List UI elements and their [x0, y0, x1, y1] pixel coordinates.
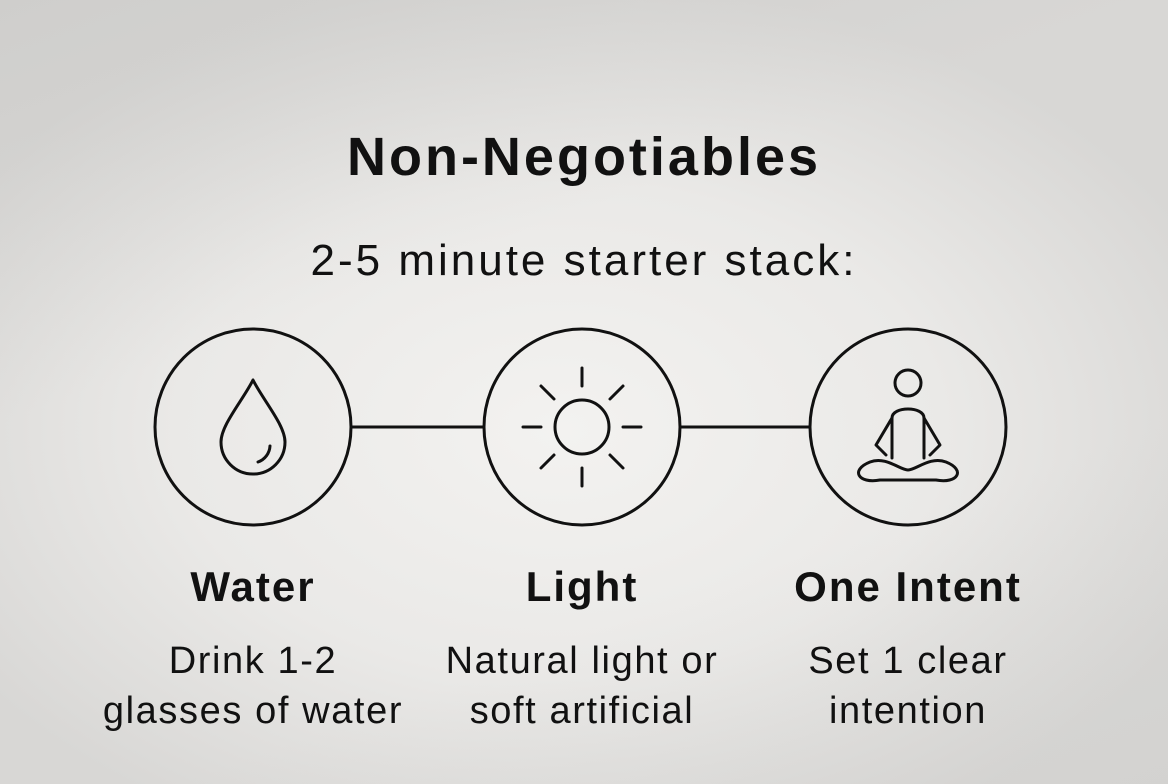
title: Non-Negotiables — [347, 127, 821, 187]
label: one intent: Set 1 clear — [808, 640, 1008, 682]
connector lines — [351, 426, 810, 428]
label: light: Light — [526, 563, 638, 610]
label: light: Natural light or — [446, 640, 718, 682]
icon: meditation — [810, 329, 1006, 525]
subtitle: 2-5 minute starter stack: — [311, 236, 857, 285]
label: water: Water — [190, 563, 316, 610]
label: one intent: intention — [829, 690, 987, 732]
label: water: glasses of water — [103, 690, 403, 732]
icon: water drop — [155, 329, 351, 525]
label: one intent — [794, 563, 1022, 732]
icon: sun — [484, 329, 680, 525]
label: water — [103, 563, 403, 732]
label: water: Drink 1-2 — [169, 640, 337, 682]
label: light: soft artificial — [470, 690, 694, 732]
label: light — [446, 563, 718, 732]
label: one intent: One Intent — [794, 563, 1022, 610]
